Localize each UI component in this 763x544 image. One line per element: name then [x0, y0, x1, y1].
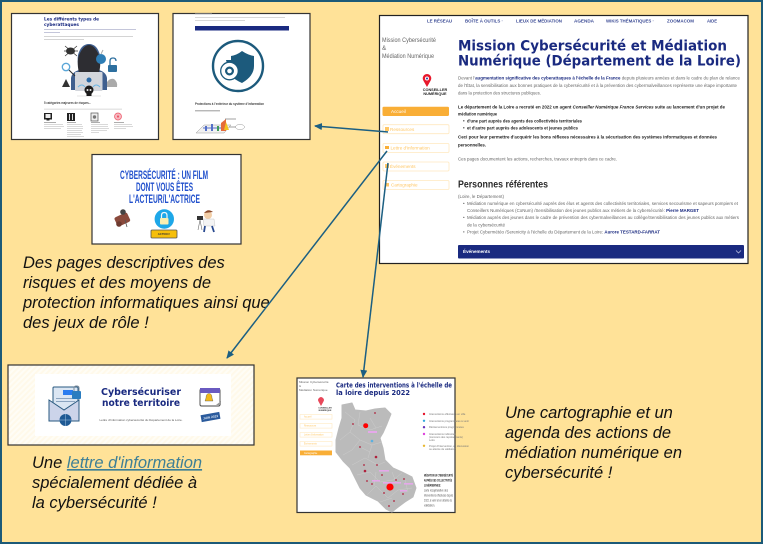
navigation bar: WIKIS THÉMATIQUES · [606, 18, 654, 24]
map legend [423, 412, 470, 451]
network diagram [196, 119, 244, 133]
panel: carte des interventions [297, 378, 470, 512]
list of referents: Médiation numérique en cybersécurité auprès des élus et agents des collectivités territoriales, services secourisme et sapeurs pompiers et [467, 201, 739, 206]
logo: conseiller numérique [423, 74, 447, 96]
project paragraph: et d'autre part auprès des adolescents et jeunes publics [467, 126, 578, 131]
logo: conseiller numérique: NUMÉRIQUE [423, 91, 447, 96]
text block: lettre d'information: Une lettre d'information [32, 454, 202, 472]
list of referents: de la cybersécurité [467, 222, 505, 227]
introduction paragraph: dans la protection des structures publiques. [458, 90, 541, 95]
list of referents: Conseillers Numériques (CoNum) /Sensibilisation des jeunes publics aux métiers de la cybersécurité: Pierre MARGET [467, 208, 699, 213]
intro text lines [195, 14, 285, 21]
sub-heading line [195, 110, 220, 111]
introduction paragraph: de l'État, la sensibilisation aux bonnes pratiques de la cybersécurité et à la prévention des cybermalveillances représente une étape importante [458, 82, 737, 88]
sidebar menu: Accueil [304, 416, 312, 419]
panel: types de cyberattaques [12, 14, 158, 140]
panel: lettre d'information [8, 365, 254, 445]
heading: personnes référentes: Personnes référentes [458, 180, 548, 190]
sidebar menu: Cartographie [304, 452, 318, 455]
project paragraph: Le département de la Loire a recruté en 2022 un agent Conseiller Numérique France Services suite au lancement d'un projet de [458, 104, 725, 109]
arrow: lettre d'information [227, 151, 387, 358]
sidebar menu: Événements [390, 163, 416, 169]
navigation bar: BOÎTE À OUTILS · [465, 18, 503, 24]
text block: pages descriptives: Des pages descriptives des [23, 254, 225, 272]
text block: lettre d'information: la cybersécurité ! [32, 494, 157, 512]
project paragraph: • [463, 119, 465, 124]
game title [120, 169, 208, 206]
project paragraph [458, 104, 725, 148]
project paragraph: personnelles. [458, 142, 486, 148]
risk category icons [44, 113, 122, 121]
map title: Carte des interventions à l'échelle de [336, 382, 452, 390]
site name: Mission Cybersécurité [299, 380, 329, 384]
newsletter subtitle: Lettre d'information cybersécurité du Département de la Loire. [100, 418, 183, 422]
introduction paragraph [458, 76, 740, 95]
map title [336, 382, 452, 397]
site name: Médiation Numérique [382, 53, 434, 60]
navigation bar: AGENDA [574, 18, 594, 24]
map description: MÉDIATION EN CYBERSÉCURITÉ [424, 472, 453, 478]
intro text lines [44, 29, 136, 40]
text block: pages descriptives: risques et des moyens de [23, 274, 211, 292]
panel: jeu de rôle [92, 154, 241, 244]
map legend: Réinterventions programmées [429, 425, 464, 429]
site name: Mission Cybersécurité [382, 37, 436, 44]
project paragraph: • [463, 126, 465, 131]
icon: calendar and bell [200, 388, 221, 406]
sidebar menu: Lettre d'information [304, 434, 324, 437]
map legend: Interventions programmées à venir [429, 419, 469, 423]
heading: protections: Protections à l'extérieur du système d'information [195, 102, 264, 106]
map description: 2022, à venir et en attente de [424, 498, 452, 502]
sidebar menu: Lettre d'information [390, 146, 430, 150]
list of referents: • [463, 201, 465, 206]
icon: envelope [49, 386, 81, 426]
main title: Mission Cybersécurité et Médiation [458, 38, 727, 54]
icon: film camera [114, 209, 131, 227]
illustration: hacker [62, 44, 117, 96]
navigation bar [427, 18, 717, 24]
navigation bar: LE RÉSEAU [427, 18, 452, 24]
map legend: Projet d'intervention, en discussion [429, 444, 470, 448]
logo: conseiller numérique: CONSEILLER [423, 88, 447, 92]
game title: CYBERSÉCURITÉ : UN FILM [120, 169, 208, 182]
text block: cartographie: agenda des actions de [505, 424, 671, 442]
sidebar menu [382, 107, 449, 190]
map description: validation. [424, 504, 435, 508]
sidebar menu: Cartographie [391, 182, 418, 188]
icon: padlock [155, 209, 174, 229]
events accordion: Événements [463, 247, 491, 254]
map description [424, 472, 453, 508]
navigation bar: LIEUX DE MÉDIATION [516, 18, 562, 24]
main title: Numérique (Département de la Loire) [458, 54, 741, 70]
arrow: ressources vers pages descriptives [315, 126, 388, 132]
sidebar menu: Événements [304, 443, 318, 446]
introduction paragraph: Devant l'augmentation significative des cyberattaques à l'échelle de la France depuis plusieurs années et dans le cadre du plan de relance [458, 76, 740, 80]
risk category text columns [44, 122, 133, 137]
events accordion [458, 245, 744, 258]
list of referents: • [463, 229, 465, 234]
text block: pages descriptives: des jeux de rôle ! [23, 314, 149, 332]
panel heading: Les différents types de [44, 16, 99, 22]
map legend: ou attente de validation [429, 447, 456, 451]
panel: page principale du site [380, 16, 748, 264]
panel: protections du système d'information [173, 14, 310, 140]
description line [44, 108, 122, 111]
logo [318, 397, 332, 412]
site name [382, 37, 436, 60]
list of referents: Médiation auprès des jeunes dans le cadre de prévention des cybermalveillances au collège/Sensibilisation des jeunes publics aux métiers [467, 215, 740, 220]
list of referents [458, 194, 740, 234]
collapsed section bar [195, 26, 289, 30]
icon: cameraman [197, 210, 215, 232]
sidebar menu: Ressources [390, 127, 415, 132]
project paragraph: d'une part auprès des agents des collectivités territoriales [467, 119, 582, 124]
panel heading [44, 16, 99, 28]
panel heading: cyberattaques [44, 22, 79, 28]
logo: NUMÉRIQUE [319, 409, 332, 412]
logo: CONSEILLER [318, 408, 332, 410]
map description: AUPRÈS DES COLLECTIVITÉS [424, 478, 452, 482]
map description: LIGÉRIENNES: [424, 482, 441, 488]
site name: Médiation Numérique [299, 388, 328, 392]
text block: pages descriptives [22, 254, 270, 332]
sidebar menu [300, 414, 332, 455]
navigation bar: ZOOMACOM [667, 18, 694, 24]
newsletter title: Cybersécuriser [101, 386, 181, 398]
text block: cartographie [505, 404, 682, 482]
game title: DONT VOUS ÊTES [136, 181, 193, 194]
map: département de la Loire [336, 403, 416, 512]
navigation bar: AIDE [707, 18, 717, 24]
project paragraph: Ceci pour leur permettre d'acquérir les bons réflexes nécessaires à la sécurisation des systèmes informatiques et données [458, 134, 717, 140]
map description: carte récapitulative des [424, 488, 448, 492]
map legend: Interventions effectuées en ville [429, 412, 466, 416]
text block: cartographie: médiation numérique en [505, 444, 682, 462]
site name: & [299, 384, 301, 388]
icon: shield and gear [213, 41, 263, 91]
sidebar menu: Accueil [391, 109, 406, 114]
heading: categories de risques: 5 catégories majeures de risques... [44, 101, 91, 105]
list of referents: Projet Cybermétéo /Serenicity à l'échelle du Département de la Loire: Aurore TESTARD-FARRAT [467, 229, 660, 234]
text block: cartographie: Une cartographie et un [505, 404, 673, 422]
project paragraph: médiation numérique [458, 112, 497, 117]
button: action: ACTION ! [158, 232, 170, 236]
arrow: événements vers carte [363, 163, 388, 377]
text block: cartographie: cybersécurité ! [505, 464, 613, 482]
map legend: Interventions indirectes [429, 432, 456, 436]
list of referents: (Loire, le Département) [458, 194, 504, 199]
map title: la loire depuis 2022 [336, 389, 410, 397]
closing sentence: Ces pages documentent les actions, recherches, travaux entrepris dans ce cadre. [458, 157, 617, 162]
site name: & [382, 45, 387, 52]
sidebar menu: Ressources [304, 425, 317, 428]
stamp: date [201, 412, 220, 422]
map description: interventions effectuées depuis [424, 494, 453, 498]
text block: lettre d'information [32, 454, 202, 512]
text block: lettre d'information: spécialement dédiée à [32, 474, 197, 492]
newsletter title [101, 386, 181, 409]
site name [299, 380, 329, 392]
list of referents: • [463, 215, 465, 220]
map legend: (concours des représentants) [429, 435, 463, 439]
newsletter title: notre territoire [102, 398, 180, 409]
main title [458, 38, 741, 70]
text block: pages descriptives: protection informatiques ainsi que [22, 294, 270, 312]
stamp: date: JUIN 2023 [203, 414, 219, 421]
map legend: Loire [429, 438, 435, 442]
game title: L'ACTEUR/L'ACTRICE [129, 194, 200, 206]
button: action [151, 230, 177, 238]
